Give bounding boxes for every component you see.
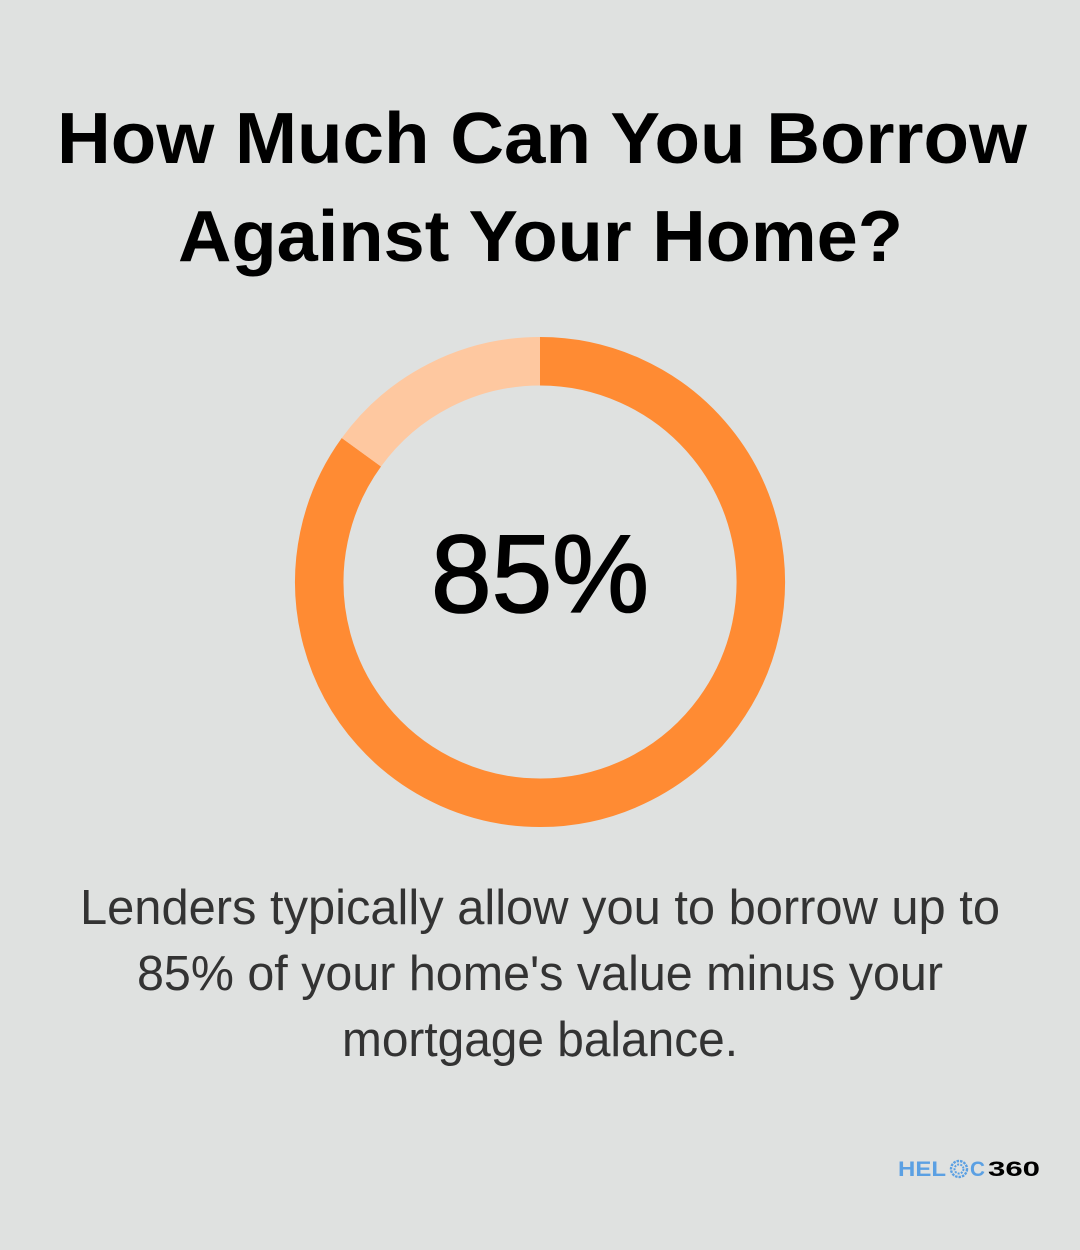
description text: 85% of your home's value minus your: [137, 947, 943, 1001]
filled arc: 85% share: [319, 361, 761, 803]
logo: HELOC360: [898, 1158, 1040, 1181]
center value: 85%: [431, 513, 649, 636]
title: Against Your Home?: [178, 197, 903, 277]
logo: HELOC360: 360: [988, 1158, 1040, 1181]
logo: HELOC360: HEL: [898, 1158, 946, 1181]
description text: mortgage balance.: [342, 1013, 738, 1067]
title: How Much Can You Borrow: [57, 99, 1028, 179]
logo: HELOC360: C: [970, 1158, 985, 1181]
icon: spiral O: [951, 1161, 967, 1177]
remaining arc: 15% share: [361, 361, 540, 452]
description text: Lenders typically allow you to borrow up to: [80, 881, 1000, 935]
title: [57, 99, 1028, 277]
description text: [80, 881, 1000, 1067]
donut chart: 85%: [319, 361, 761, 803]
